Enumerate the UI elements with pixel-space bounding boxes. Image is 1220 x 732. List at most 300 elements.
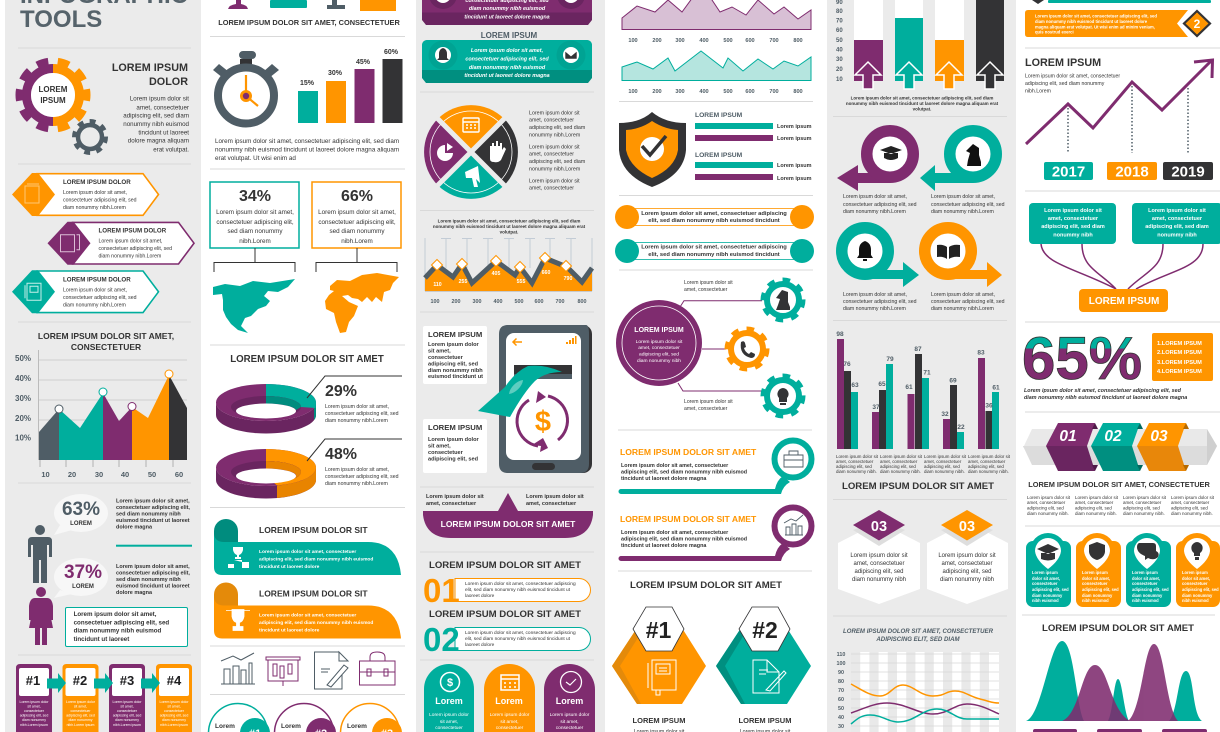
panel: circular arrows: diam nonummy nibh.Lorem [931, 306, 994, 312]
chart: four-part wheel [424, 105, 586, 199]
panel: three arched cards: sit amet, [560, 719, 579, 725]
heading: LOREM IPSUM DOLOR SIT AMET [429, 609, 581, 620]
panel: orange ribbon: adipiscing elit, sed diam nonummy nibh euismod [259, 620, 373, 626]
panel: pin cards: Lorem ipsum [1182, 570, 1208, 575]
panel: pin cards: dolor sit amet, [1182, 576, 1210, 581]
text columns: amet, consectetuer [1027, 500, 1066, 505]
chart: grouped bars: adipiscing elit, sed [924, 464, 960, 469]
chart: grouped bars: adipiscing elit, sed [968, 464, 1004, 469]
chart: orange area with markers: 400 [494, 299, 502, 305]
panel: orange ribbon: LOREM IPSUM DOLOR SIT [259, 588, 368, 598]
chart: orange area with markers: 660 [542, 270, 550, 276]
text columns: Lorem ipsum dolor sit [1027, 495, 1071, 500]
panel: pin cards: dolor sit amet, [1082, 576, 1110, 581]
panel: teal banner: consectetuer adipiscing elit, sed [465, 56, 549, 62]
area chart: 40 [121, 470, 129, 479]
chart: grouped bars: 36 [985, 402, 993, 410]
chart: grouped bars: amet, consectetuer [968, 459, 1006, 464]
area chart heading: CONSECTETUER [71, 342, 141, 352]
panel: teal callout: adipiscing elit, sed diam nonummy nibh euismod [621, 470, 747, 476]
chart: grouped bars: 69 [949, 378, 957, 384]
panel: purple triangle banner: Lorem ipsum dolor sit [526, 494, 584, 500]
list item 02: 02 [423, 621, 460, 658]
chart: orange area with markers: 110 [433, 282, 442, 288]
chart: orange area with markers: 200 [452, 299, 460, 305]
card: text one: sit amet, [428, 348, 451, 354]
chart: donut 48%: diam nonummy nibh.Lorem [325, 481, 388, 487]
pill: teal: Lorem ipsum dolor sit amet, consectetuer adipiscing [641, 244, 787, 250]
text columns [1027, 495, 1215, 516]
pill: orange: Lorem ipsum dolor sit amet, consectetuer adipiscing [641, 211, 787, 217]
heading: LOREM IPSUM DOLOR SIT AMET, CONSECTETUER [218, 18, 400, 27]
icon: document [314, 652, 348, 689]
panel: teal arrow label: consectetuer adipiscing elit, sed [63, 295, 137, 301]
chart: line curves: 100 [836, 661, 846, 667]
panel: orange arrow label: diam nonummy nibh.Lorem [63, 205, 126, 211]
card: text two: sit amet, [428, 444, 451, 450]
chart: arrow bar chart: 50 [836, 38, 843, 44]
chart: arrow bar chart: 30 [836, 57, 843, 63]
chart: four-part wheel: nonummy nibh.Lorem [529, 132, 581, 138]
panel: 34% map: consectetuer adipiscing elit, [216, 219, 294, 226]
panel: gear diagram: IPSUM [40, 96, 66, 105]
chart: arrow bar chart: 60 [836, 28, 843, 34]
panel: numbered steps: consectetuer [24, 709, 45, 713]
panel: purple arrow label [48, 222, 194, 265]
chart: orange area with markers: 600 [534, 299, 544, 305]
chart: arrow bar chart: 70 [836, 19, 843, 25]
card: text one: LOREM IPSUM [428, 330, 482, 339]
panel: teal ribbon [214, 519, 401, 575]
panel: gear diagram: tincidunt ut laoreet [138, 129, 189, 136]
diagram: merge tree: adipiscing elit, sed diam [1145, 224, 1209, 230]
chart: growth line: Lorem ipsum dolor sit amet, consectetuer [1025, 74, 1120, 80]
hexagon card #1: LOREM IPSUM [633, 716, 685, 725]
panel: gear diagram: amet, consectetuer [136, 104, 189, 111]
panel: pin cards: diam nonummy [1182, 593, 1213, 598]
chart: donut 48%: Lorem ipsum dolor sit amet, [325, 467, 389, 473]
chart: grouped bars: diam nonummy nibh. [880, 469, 921, 474]
panel: numbered steps: nibh.Lorem ipsum [67, 723, 94, 727]
chart: teal area [622, 51, 811, 95]
bar chart: percentages: 15% [300, 80, 315, 87]
chart: donut 29%: consectetuer adipiscing elit, sed [325, 411, 399, 417]
panel: three arched cards: $ [447, 677, 453, 689]
chart: purple area [622, 0, 811, 44]
panel: circular arrows: consectetuer adipiscing elit, sed [843, 299, 917, 305]
panel: pin cards: adipiscing elit, sed [1132, 587, 1169, 592]
panel: pin cards: diam nonummy [1032, 593, 1063, 598]
panel: pin cards: consectetuer [1182, 581, 1208, 586]
panel: circular arrows: Lorem ipsum dolor sit amet, [843, 292, 907, 298]
chart: orange area with markers [425, 238, 592, 305]
chart: line curves: 110 [837, 652, 845, 658]
icon: phone with cash: $ [535, 406, 551, 438]
panel: numbered steps: Lorem ipsum dolor [66, 700, 96, 704]
card: text two: consectetuer [428, 450, 464, 456]
chart: teal area: 800 [793, 89, 803, 95]
bar chart: percentages: 30% [328, 70, 343, 77]
title: TOOLS [20, 6, 102, 33]
chart: grouped bars: 71 [923, 370, 931, 376]
panel: pin cards: Lorem ipsum [1132, 570, 1158, 575]
chart: four-part wheel: Lorem ipsum dolor sit [529, 110, 580, 116]
panel: three arched cards: consectetuer [496, 725, 524, 731]
panel: teal ribbon: LOREM IPSUM DOLOR SIT [259, 525, 368, 535]
text block: erat volutpat. Ut wisi enim ad [215, 155, 296, 162]
panel: pin cards: nibh euismod [1132, 598, 1159, 603]
panel: numbered steps: diam nonummy [22, 718, 46, 722]
chart: teal area: 700 [769, 89, 779, 95]
card: text one [423, 326, 487, 384]
panel: gender statistics: LOREM [72, 584, 94, 590]
chart: purple area: 300 [675, 38, 685, 44]
panel: circular arrows [837, 131, 1005, 312]
chart: grouped bars: diam nonummy nibh. [968, 469, 1009, 474]
chart: purple area: 500 [723, 38, 733, 44]
hexagon card orange: amet, consectetuer [941, 561, 993, 567]
chart: grouped bars: 83 [977, 350, 985, 356]
chart: growth line: 2018 [1115, 164, 1149, 180]
text columns: amet, consectetuer [1171, 500, 1210, 505]
chart: arrow bar chart: volutpat. [913, 106, 931, 111]
chart: grouped bars: 87 [914, 346, 922, 353]
area chart heading [38, 331, 174, 352]
panel: numbered steps [16, 664, 192, 732]
panel: numbered steps: sit amet, [120, 704, 134, 708]
panel: 66% map: 66% [341, 188, 373, 205]
panel: three arched cards [424, 664, 595, 732]
stat: 65%: 2.LOREM IPSUM [1157, 350, 1202, 356]
diagram: circle with gears: LOREM IPSUM [634, 327, 684, 334]
stat: 65%: 65% [1022, 325, 1142, 392]
diagram: merge tree: amet, consectetuer [1048, 216, 1099, 222]
list item 01: laoreet dolore [465, 593, 495, 599]
chart: horizontal bars: LOREM IPSUM [695, 152, 743, 159]
panel: numbered steps: #4 [167, 673, 182, 688]
panel: purple banner: diam nonummy nibh euismod [469, 6, 546, 12]
area chart: 50 [148, 470, 156, 479]
panel: numbered steps: adipiscing elit, sed [66, 714, 95, 718]
panel: gear diagram: erat volutpat. [153, 146, 189, 153]
panel: purple triangle banner: Lorem ipsum dolor sit [426, 494, 484, 500]
panel: teal banner: tincidunt ut laoreet dolore magna [464, 73, 550, 79]
text columns: adipiscing elit, sed [1075, 506, 1112, 510]
chart: growth line: adipiscing elit, sed diam nonummy [1025, 81, 1105, 87]
diagram: merge tree: nonummy nibh [1157, 232, 1197, 238]
heading: LOREM IPSUM DOLOR SIT AMET [630, 580, 782, 591]
panel: gender statistics: Lorem ipsum dolor sit amet, [116, 499, 190, 505]
area chart: 30% [15, 394, 31, 403]
panel: circular arrows: Lorem ipsum dolor sit amet, [931, 194, 995, 200]
chart: grouped bars: 61 [992, 384, 1000, 392]
panel: orange arrow label: LOREM IPSUM DOLOR [63, 179, 131, 186]
panel: gender statistics: euismod tincidunt ut laoreet [116, 584, 190, 590]
panel: gender statistics: 37% [64, 562, 102, 583]
chart: teal area: 300 [675, 89, 685, 95]
chart: line curves: 40 [838, 715, 844, 721]
chart: teal area: 500 [723, 89, 733, 95]
bar chart: percentages: 45% [356, 59, 371, 66]
panel: teal callout: tincidunt ut laoreet dolore magna [621, 476, 707, 482]
chart: arrow bar chart: Lorem ipsum dolor sit amet, consectetuer adipiscing elit, sed diam [851, 96, 993, 101]
diagram: 3D chevrons [1023, 423, 1217, 471]
panel: orange ribbon: tincidunt ut laoreet dolore [259, 628, 320, 634]
heading: LOREM IPSUM DOLOR SIT AMET [429, 560, 581, 571]
stat: 65%: 4.LOREM IPSUM [1157, 369, 1202, 375]
icon: shield [619, 112, 686, 187]
panel: circle badges [208, 704, 402, 732]
diagram: circle with gears: amet, consectetuer [638, 345, 680, 351]
panel: gear diagram [20, 62, 190, 153]
list item 01: 01 [423, 572, 460, 609]
panel: teal arrow label: Lorem ipsum dolor sit amet, [63, 287, 127, 293]
panel: numbered steps: Lorem ipsum dolor [160, 700, 189, 704]
diagram: 3D chevrons: 01 [1059, 428, 1077, 445]
area chart: 40% [15, 374, 31, 383]
stat: 65%: 1.LOREM IPSUM [1157, 341, 1202, 347]
text columns: diam nonummy nibh. [1171, 511, 1213, 516]
area chart: 60 [175, 470, 183, 479]
chart: bell curves [1026, 641, 1207, 732]
hexagon card #1: #1 [646, 617, 671, 643]
card: text one: adipiscing elit, sed [428, 362, 479, 368]
chart: donut 29%: Lorem ipsum dolor sit amet, [325, 404, 389, 410]
text block: nonummy nibh euismod tincidunt ut laoreet dolore magna aliquam erat [433, 224, 586, 229]
text block: volutpat. [500, 229, 518, 234]
chart: grouped bars: 32 [941, 411, 949, 418]
panel: pin cards: consectetuer [1132, 581, 1158, 586]
panel: 66% map: nibh.Lorem [341, 238, 373, 245]
card: text two: Lorem ipsum dolor [428, 437, 479, 443]
panel: gender statistics: consectetuer adipiscing elit, sed [74, 619, 169, 626]
text columns: adipiscing elit, sed [1171, 506, 1208, 510]
area chart: 20% [15, 414, 31, 423]
pill: orange [615, 205, 814, 229]
chart: grouped bars: 65 [878, 381, 886, 388]
chart: orange area with markers: 500 [514, 299, 524, 305]
chart: horizontal bars [695, 112, 812, 182]
panel: pin cards: nibh euismod [1182, 598, 1209, 603]
panel: circular arrows: Lorem ipsum dolor sit amet, [843, 194, 907, 200]
area chart: 10 [41, 470, 50, 479]
panel: circular arrows: diam nonummy nibh.Lorem [931, 209, 994, 215]
hexagon card purple: adipiscing elit, sed [854, 569, 904, 575]
panel: numbered steps: #3 [120, 673, 134, 688]
chart: teal area: 200 [652, 89, 662, 95]
chart: line curves: 80 [838, 679, 844, 685]
panel: gender statistics: LOREM [70, 521, 92, 527]
panel: gender statistics: sed diam nonummy nibh [116, 577, 181, 583]
chart: orange area with markers: 405 [492, 271, 500, 277]
area chart heading: LOREM IPSUM DOLOR SIT AMET, [38, 331, 174, 341]
panel: circle badges: Lorem [347, 723, 367, 730]
panel: numbered steps: Lorem ipsum dolor [113, 700, 142, 704]
icon: bar chart [221, 653, 255, 684]
chart: line curves: 90 [838, 670, 844, 676]
chart: growth line [1025, 57, 1213, 180]
panel: purple arrow label: Lorem ipsum dolor sit amet, [98, 239, 163, 245]
chart: donut 48%: consectetuer adipiscing elit, sed [325, 474, 399, 480]
chart: four-part wheel: adipiscing elit, sed diam [529, 159, 586, 165]
chart: purple area: 600 [745, 38, 755, 44]
text columns: adipiscing elit, sed [1027, 506, 1064, 510]
chart: arrow bar chart: 10 [836, 77, 843, 83]
panel: teal ribbon: adipiscing elit, sed diam nonummy nibh euismod [259, 556, 373, 562]
panel: pin cards: dolor sit amet, [1032, 576, 1060, 581]
panel: numbered steps: nibh.Lorem ipsum [20, 723, 48, 727]
diagram: circle with gears: Lorem ipsum dolor sit [684, 280, 733, 286]
stat: 65% [1024, 333, 1213, 400]
panel: three arched cards: Lorem ipsum dolor [429, 712, 469, 718]
chart: orange area with markers: 100 [430, 299, 440, 305]
text block: Lorem ipsum dolor sit amet, consectetuer adipiscing elit, sed diam [438, 219, 580, 224]
panel: teal callout: Lorem ipsum dolor sit amet, consectetuer [621, 463, 729, 469]
hexagon card orange [927, 510, 1008, 604]
chart: teal area: 600 [745, 89, 755, 95]
text columns: adipiscing elit, sed [1123, 506, 1160, 510]
chart: grouped bars: Lorem ipsum dolor sit [880, 454, 923, 459]
chart: purple area: 800 [793, 38, 803, 44]
chart: horizontal bars: Lorem ipsum [777, 136, 812, 142]
list item 01 [423, 572, 590, 609]
panel: circular arrows: Lorem ipsum dolor sit amet, [931, 292, 995, 298]
panel: purple banner: tincidunt ut laoreet dolore magna [464, 14, 550, 20]
hexagon card purple: amet, consectetuer [853, 561, 905, 567]
panel: numbered steps: #1 [26, 673, 40, 688]
chart: four-part wheel: nonummy nibh.Lorem [529, 166, 581, 172]
banner: orange step 2 [1025, 10, 1210, 37]
icon: briefcase [360, 652, 395, 685]
panel: 34% map [210, 182, 299, 333]
chart: arrow bar chart: 90 [836, 0, 843, 6]
panel: pin cards: diam nonummy [1082, 593, 1113, 598]
chart: grouped bars: diam nonummy nibh. [836, 469, 877, 474]
chart: grouped bars: adipiscing elit, sed [880, 464, 916, 469]
panel: 34% map: sed diam nonummy [228, 228, 283, 235]
chart: teal area: 100 [628, 89, 638, 95]
panel: numbered steps: consectetuer [117, 709, 138, 713]
area chart: 20 [68, 470, 76, 479]
banner: orange step 2: diam nonummy nibh euismod tincidunt ut laoreet dolore [1035, 19, 1148, 24]
panel: circle badges: Lorem [281, 723, 301, 730]
panel: purple triangle banner: LOREM IPSUM DOLOR SIT AMET [441, 519, 576, 529]
panel: pin cards: consectetuer [1032, 581, 1058, 586]
chart: horizontal bars: Lorem ipsum [777, 176, 812, 182]
chart: grouped bars: amet, consectetuer [880, 459, 918, 464]
chart: line curves: 50 [838, 706, 844, 712]
heading: LOREM IPSUM [481, 31, 538, 40]
chart: arrow bar chart: 20 [836, 67, 843, 73]
diagram: merge tree [1029, 203, 1220, 312]
chart: line curves: 70 [838, 688, 844, 694]
chart: grouped bars: 37 [872, 404, 880, 411]
panel: numbered steps: adipiscing elit, sed [113, 714, 141, 718]
panel: numbered steps: sit amet, [74, 704, 87, 708]
panel: pin cards: diam nonummy [1132, 593, 1163, 598]
text block: nonummy nibh euismod tincidunt ut laoreet dolore magna aliquam [215, 146, 399, 154]
chart: donut 29%: diam nonummy nibh.Lorem [325, 418, 388, 424]
panel: circular arrows: consectetuer adipiscing elit, sed [931, 202, 1005, 208]
panel: three arched cards: Lorem ipsum dolor [490, 712, 530, 718]
banner: orange step 2: magna aliquam erat volutpat. Ut wisi enim ad minim veniam, [1035, 24, 1155, 29]
chart: grouped bars: Lorem ipsum dolor sit [836, 454, 879, 459]
panel: pin cards: Lorem ipsum [1082, 570, 1108, 575]
panel: gender statistics: diam nonummy nibh euismod [74, 628, 161, 635]
panel: gender statistics: Lorem ipsum dolor sit amet, [116, 564, 190, 570]
text columns: diam nonummy nibh. [1027, 511, 1069, 516]
panel: orange ribbon [214, 582, 401, 638]
card: text one: euismod tincidunt ut [428, 374, 483, 380]
hexagon card purple: 03 [871, 519, 887, 535]
panel: teal banner [422, 40, 592, 83]
panel: teal banner: diam nonummy nibh euismod [469, 65, 546, 71]
panel: numbered steps: consectetuer [164, 709, 185, 713]
chart: line curves [836, 652, 999, 732]
hexagon card purple [838, 510, 920, 604]
panel: 66% map: Lorem ipsum dolor sit amet, [318, 209, 396, 216]
panel: purple callout: Lorem ipsum dolor sit amet, consectetuer [621, 530, 729, 536]
stat: 65%: 3.LOREM IPSUM [1157, 360, 1202, 366]
panel: three arched cards: sit amet, [500, 719, 519, 725]
card: text one: Lorem ipsum dolor [428, 342, 479, 348]
hexagon card #2: LOREM IPSUM [739, 716, 791, 725]
chart: grouped bars: 61 [905, 384, 913, 391]
panel: purple callout: tincidunt ut laoreet dolore magna [621, 543, 707, 549]
panel: gender statistics: dolore magna [116, 525, 153, 531]
text block [433, 219, 586, 234]
panel: gear diagram: Lorem ipsum dolor sit [130, 96, 189, 103]
chart: grouped bars: 63 [851, 382, 859, 389]
bar chart: percentages: 60% [384, 49, 399, 56]
diagram: circle with gears: adipiscing elit, sed [639, 352, 679, 358]
chart: four-part wheel: Lorem ipsum dolor sit [529, 178, 580, 184]
panel: numbered steps: adipiscing elit, sed [20, 714, 48, 718]
hexagon card purple: Lorem ipsum dolor sit [850, 553, 908, 559]
chart: horizontal bars: LOREM IPSUM [695, 112, 743, 119]
panel: pin cards: adipiscing elit, sed [1032, 587, 1069, 592]
panel: numbered steps: sit amet, [27, 704, 41, 708]
panel: three arched cards: Lorem ipsum dolor [550, 712, 590, 718]
panel: numbered steps: #2 [73, 673, 87, 688]
panel: pin cards: consectetuer [1082, 581, 1108, 586]
chart: purple area: 400 [699, 38, 709, 44]
list item 02: Lorem ipsum dolor sit amet, consectetuer adipiscing [465, 630, 576, 636]
chart: purple area: 100 [628, 38, 638, 44]
panel: purple callout: adipiscing elit, sed diam nonummy nibh euismod [621, 536, 747, 542]
heading [843, 628, 994, 643]
diagram: merge tree: adipiscing elit, sed diam [1041, 224, 1105, 230]
panel: teal arrow label [12, 270, 158, 313]
list item 01: Lorem ipsum dolor sit amet, consectetuer adipiscing [465, 581, 576, 587]
diagram: merge tree: Lorem ipsum dolor sit [1148, 208, 1206, 214]
panel: teal callout: LOREM IPSUM DOLOR SIT AMET [620, 447, 757, 457]
panel: orange ribbon: Lorem ipsum dolor sit amet, consectetuer [259, 612, 356, 618]
chart: line curves: 30 [838, 724, 844, 730]
text columns: Lorem ipsum dolor sit [1171, 495, 1215, 500]
panel: orange arrow label [12, 173, 158, 216]
panel: gear diagram: LOREM [39, 85, 68, 94]
panel: circular arrows: consectetuer adipiscing elit, sed [843, 202, 917, 208]
list item 01: elit, sed diam nonummy nibh euismod tincidunt ut [465, 587, 571, 593]
panel: 34% map: 34% [239, 188, 271, 205]
panel: purple triangle banner: amet, consectetuer [426, 501, 477, 507]
list item 02 [423, 621, 590, 658]
chart: orange area with markers: 800 [578, 299, 586, 305]
panel: purple arrow label: diam nonummy nibh.Lorem [98, 254, 161, 260]
icon: phone with cash [478, 325, 592, 473]
chart: grouped bars [836, 331, 1011, 474]
